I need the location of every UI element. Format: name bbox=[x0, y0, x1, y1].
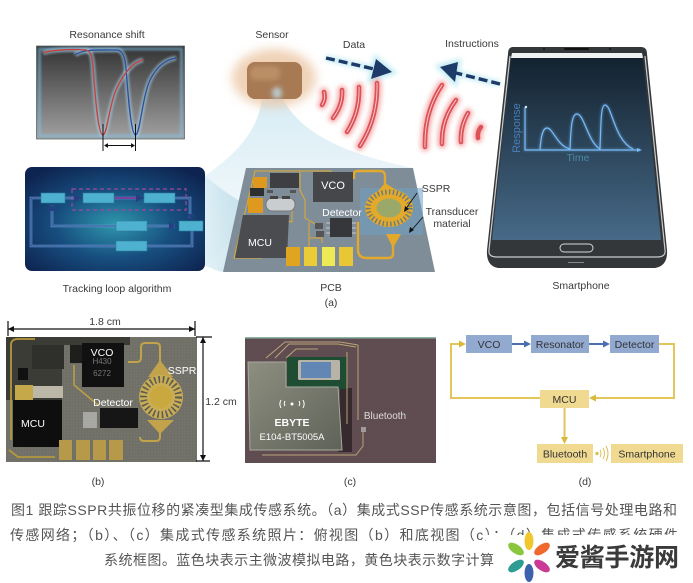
panel: tracking loop algorithm bbox=[25, 167, 205, 271]
heading: resonance shift: Resonance shift bbox=[69, 29, 145, 41]
VCO block: H430 bbox=[92, 357, 112, 366]
VCO block: 6272 bbox=[93, 369, 111, 378]
arrows: SSPR and transducer pointers bbox=[404, 193, 423, 233]
MCU block: MCU bbox=[21, 418, 45, 430]
VCO chip bbox=[313, 172, 353, 202]
label: transducer material: material bbox=[433, 218, 471, 230]
icon: outgoing radio waves bbox=[322, 83, 377, 146]
label: panel d: (d) bbox=[579, 476, 591, 488]
chart: response curve: Time bbox=[567, 152, 590, 164]
detector chip: Detector bbox=[322, 207, 362, 219]
caption text: 系统框图。蓝色块表示主微波模拟电路，黄色块表示数字计算 bbox=[104, 552, 494, 568]
resonator bbox=[128, 343, 183, 441]
icon: wireless waves bbox=[596, 446, 608, 461]
caption text bbox=[10, 502, 693, 583]
icon: incoming radio waves bbox=[425, 85, 481, 147]
icon: flower bbox=[506, 532, 552, 582]
photo b: top view: Detector bbox=[93, 397, 133, 409]
resonator block: Resonator bbox=[536, 339, 585, 351]
caption text: 传感网络；（b）、（c）集成式传感系统照片：俯视图（b）和底视图（c）；（d）集成式传感系统硬件 bbox=[10, 527, 678, 544]
label: PCB: PCB bbox=[320, 282, 342, 294]
photo c: bottom view bbox=[245, 337, 436, 463]
label: panel b: (b) bbox=[92, 476, 104, 488]
photo c: bottom view: EBYTE bbox=[274, 417, 310, 429]
logo text: 爱酱手游网 bbox=[555, 544, 679, 572]
label: data: Data bbox=[343, 39, 365, 51]
MCU block bbox=[540, 390, 589, 408]
label: panel a: (a) bbox=[325, 297, 337, 309]
MCU chip: MCU bbox=[248, 237, 272, 249]
photo c: bottom view: Bluetooth bbox=[364, 411, 406, 422]
label: tracking loop algorithm: Tracking loop algorithm bbox=[63, 283, 172, 295]
smartphone block bbox=[611, 444, 683, 463]
dimension: height 1.2 cm bbox=[196, 337, 237, 461]
label: SSPR: SSPR bbox=[422, 183, 451, 195]
PCB illustration bbox=[223, 168, 435, 272]
bluetooth block bbox=[537, 444, 593, 463]
label: sensor: Sensor bbox=[255, 29, 289, 41]
label: panel c: (c) bbox=[344, 476, 356, 488]
VCO block: VCO bbox=[91, 347, 113, 359]
VCO block: VCO bbox=[478, 339, 500, 351]
arrow: data bbox=[326, 58, 392, 79]
chart: response curve bbox=[511, 103, 642, 164]
MCU chip bbox=[235, 215, 289, 258]
VCO block bbox=[466, 335, 512, 353]
block diagram d bbox=[451, 335, 683, 463]
dimension: width 1.8 cm: 1.8 cm bbox=[89, 316, 121, 328]
MCU block bbox=[13, 400, 62, 447]
arrow: instructions bbox=[440, 62, 500, 84]
label: transducer material: Transducer bbox=[426, 206, 478, 218]
VCO chip: VCO bbox=[321, 180, 345, 192]
VCO block bbox=[82, 343, 124, 387]
smartphone bbox=[487, 47, 667, 268]
small components bbox=[248, 173, 324, 237]
label: instructions: Instructions bbox=[445, 38, 499, 50]
bluetooth block: Bluetooth bbox=[543, 448, 587, 460]
chart: resonance shift bbox=[36, 46, 184, 151]
photo b: top view: SSPR bbox=[168, 365, 197, 377]
photo c: bottom view: E104-BT5005A bbox=[260, 432, 325, 443]
caption text: 图1 跟踪SSPR共振位移的紧凑型集成传感系统。（a）集成式SSP传感系统示意图，包括信号处理电路和 bbox=[11, 502, 677, 518]
detector block bbox=[610, 335, 659, 353]
watermark logo bbox=[506, 532, 679, 582]
chart: response curve: Response bbox=[511, 103, 523, 153]
SSPR ring bbox=[365, 189, 413, 227]
swoosh beams from sensor and algorithm to PCB bbox=[205, 97, 413, 272]
detector block: Detector bbox=[615, 339, 655, 351]
MCU block: MCU bbox=[553, 394, 576, 406]
icon: sensor bbox=[232, 49, 316, 107]
dimension: height 1.2 cm: 1.2 cm bbox=[205, 396, 237, 408]
label: smartphone: Smartphone bbox=[552, 280, 610, 292]
dimension: width 1.8 cm bbox=[8, 316, 195, 336]
smartphone block: Smartphone bbox=[618, 448, 676, 460]
feed lines of resonator bbox=[354, 171, 393, 258]
detector chip bbox=[322, 207, 362, 237]
photo b: top view bbox=[6, 337, 197, 462]
contact pads bbox=[286, 247, 353, 266]
resonator block bbox=[531, 335, 589, 353]
gold pads bbox=[59, 440, 123, 460]
